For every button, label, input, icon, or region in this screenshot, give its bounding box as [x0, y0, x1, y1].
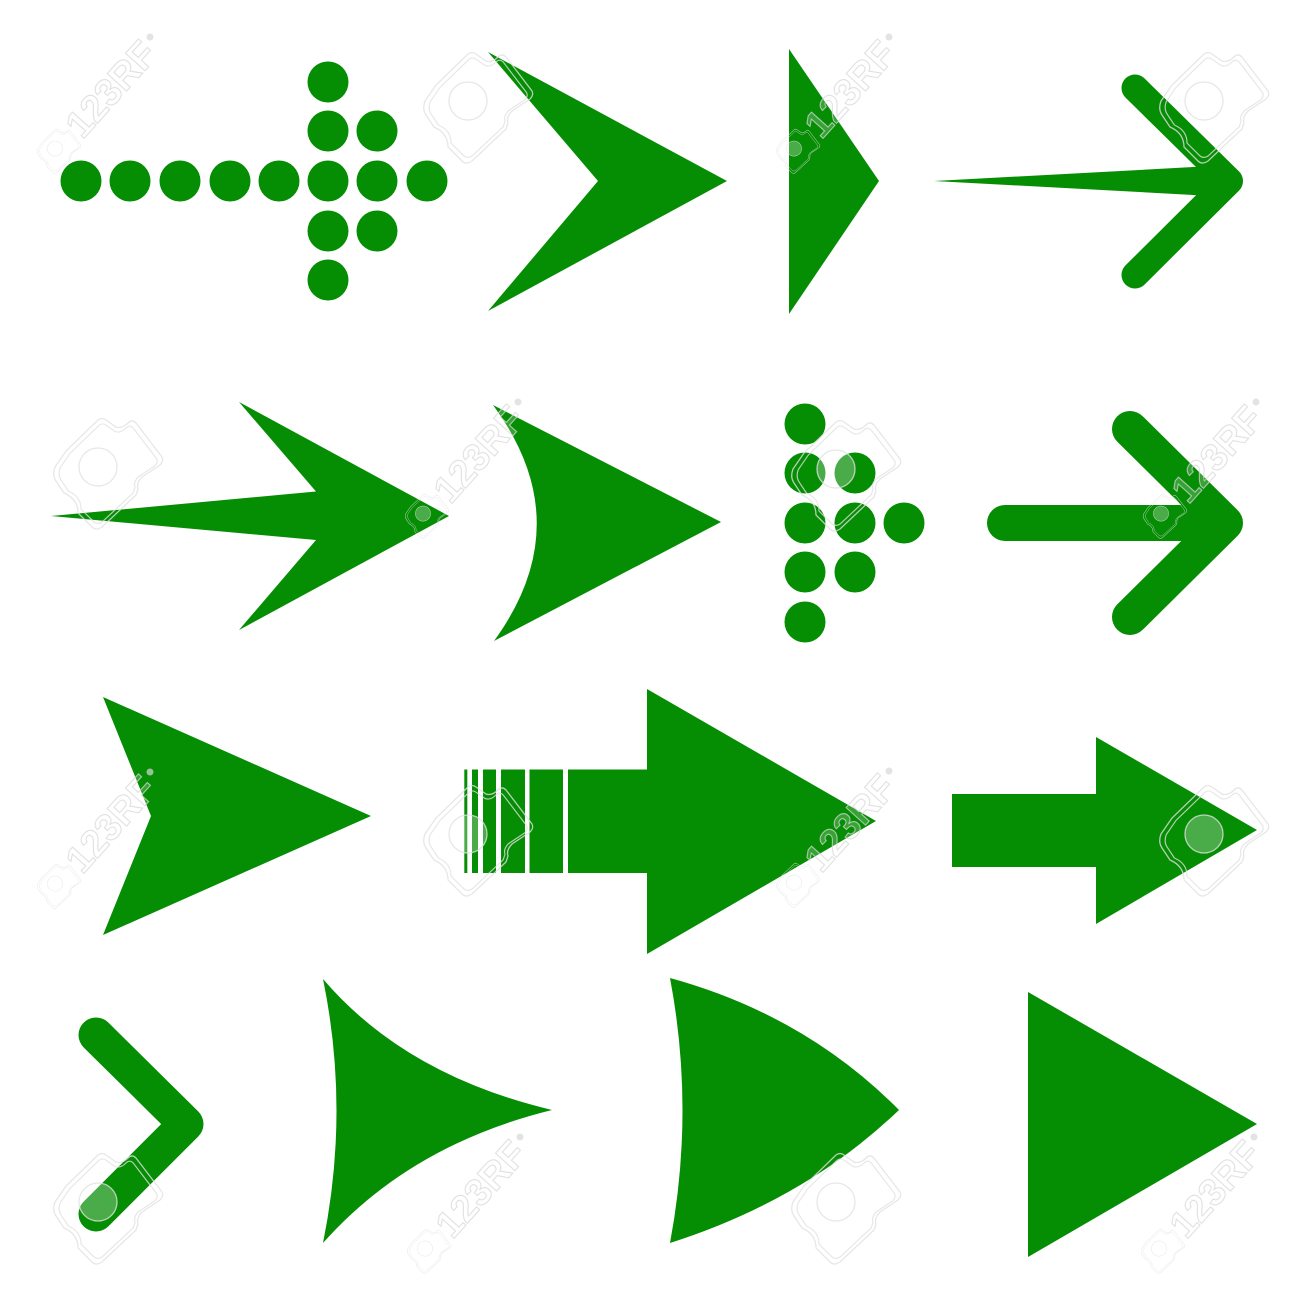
arrow: plain triangle row 4: [1028, 992, 1257, 1257]
arrow: notched dart row 3: [103, 697, 371, 935]
arrow: rounded line arrow row 2: [1005, 429, 1225, 617]
arrow: chevron row 4: [96, 1035, 186, 1214]
arrow: concave sided triangle row 4: [323, 979, 552, 1243]
arrow: dotted arrow row 1: [60, 62, 448, 300]
arrow: notched chevron row 1: [488, 52, 727, 311]
arrow: block arrow row 3: [952, 737, 1257, 924]
arrow: convex sided triangle row 4: [670, 978, 899, 1243]
arrow: striped tail arrow row 3: [464, 689, 876, 954]
arrow: barbed arrow row 2: [51, 402, 449, 630]
arrow: dotted triangle row 2: [784, 404, 924, 642]
arrow: half triangle row 1: [789, 49, 879, 314]
arrow: tapered line arrow row 1: [934, 88, 1230, 275]
arrow: curved back arrow row 2: [493, 405, 721, 641]
